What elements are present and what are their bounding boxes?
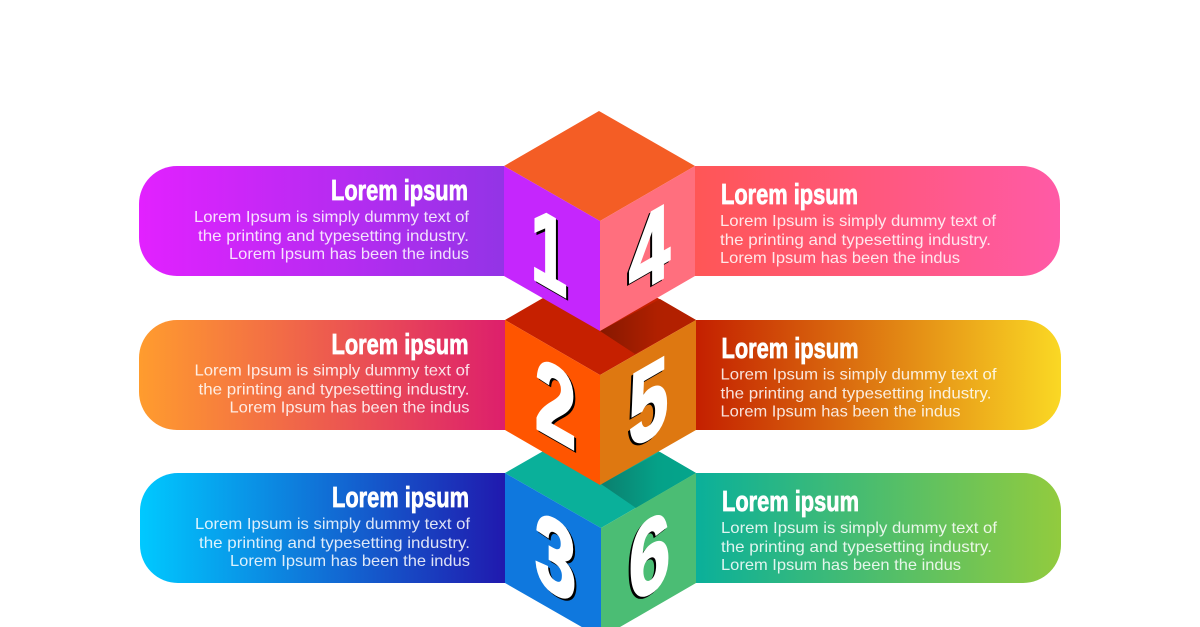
heading: item 3: Lorem ipsum — [332, 482, 469, 514]
heading: item 5: Lorem ipsum — [722, 333, 858, 365]
text block: item 4: Lorem Ipsum is simply dummy text of — [720, 213, 997, 230]
panel: item 5 — [696, 320, 1061, 430]
text block: item 2: Lorem Ipsum has been the indus — [230, 400, 470, 416]
cube: top (1 and 4) — [504, 111, 695, 331]
text block: item 1: Lorem Ipsum is simply dummy text of — [194, 209, 470, 226]
number 4: 4 — [629, 179, 670, 319]
text block: item 5: the printing and typesetting industry. — [720, 386, 992, 402]
panel: item 3 — [140, 473, 505, 583]
text block: item 3: the printing and typesetting industry. — [199, 535, 470, 552]
number 5: 5 — [627, 334, 666, 473]
number 5: 5 — [629, 332, 668, 471]
text block: item 1: Lorem Ipsum has been the indus — [229, 246, 469, 263]
text block: item 4: the printing and typesetting industry. — [720, 232, 991, 249]
number 2: 2 — [535, 332, 576, 473]
panel: item 6 — [696, 473, 1061, 583]
text block: item 3: Lorem Ipsum has been the indus — [230, 553, 470, 570]
text block: item 6 — [721, 520, 998, 574]
text block: item 1: the printing and typesetting industry. — [198, 228, 469, 245]
text block: item 2 — [194, 362, 470, 416]
number 4: 4 — [627, 181, 668, 321]
number 1 — [531, 182, 569, 322]
text block: item 2: Lorem Ipsum is simply dummy text of — [194, 362, 470, 380]
number 6: 6 — [627, 488, 668, 627]
text block: item 2: the printing and typesetting industry. — [198, 382, 470, 398]
number 1: 1 — [531, 182, 567, 320]
cube: middle (2 and 5) — [505, 265, 696, 485]
text block: item 6: Lorem Ipsum has been the indus — [721, 557, 961, 574]
text block: item 6: Lorem Ipsum is simply dummy text of — [721, 520, 998, 537]
heading: item 4: Lorem ipsum — [721, 179, 858, 211]
number 1: 1 — [533, 185, 569, 322]
text block: item 4 — [720, 213, 997, 267]
text block: item 4: Lorem Ipsum has been the indus — [720, 250, 960, 267]
text block: item 5 — [720, 366, 997, 420]
text block: item 6: the printing and typesetting industry. — [721, 539, 992, 556]
number 2: 2 — [537, 335, 578, 475]
number 6: 6 — [629, 486, 670, 626]
text block: item 3 — [195, 516, 471, 570]
text block: item 3: Lorem Ipsum is simply dummy text of — [195, 516, 471, 533]
heading: item 1: Lorem ipsum — [331, 175, 468, 207]
panel: item 1 — [139, 166, 504, 276]
cube: bottom (3 and 6) — [505, 418, 696, 627]
text block: item 5: Lorem Ipsum is simply dummy text of — [720, 366, 997, 384]
number 5 — [627, 332, 668, 473]
panel: item 4 — [695, 166, 1060, 276]
text block: item 5: Lorem Ipsum has been the indus — [720, 404, 961, 420]
heading: item 6: Lorem ipsum — [722, 486, 859, 518]
panel: item 2 — [139, 320, 505, 430]
heading: item 2: Lorem ipsum — [332, 329, 468, 361]
text block: item 1 — [194, 209, 470, 263]
